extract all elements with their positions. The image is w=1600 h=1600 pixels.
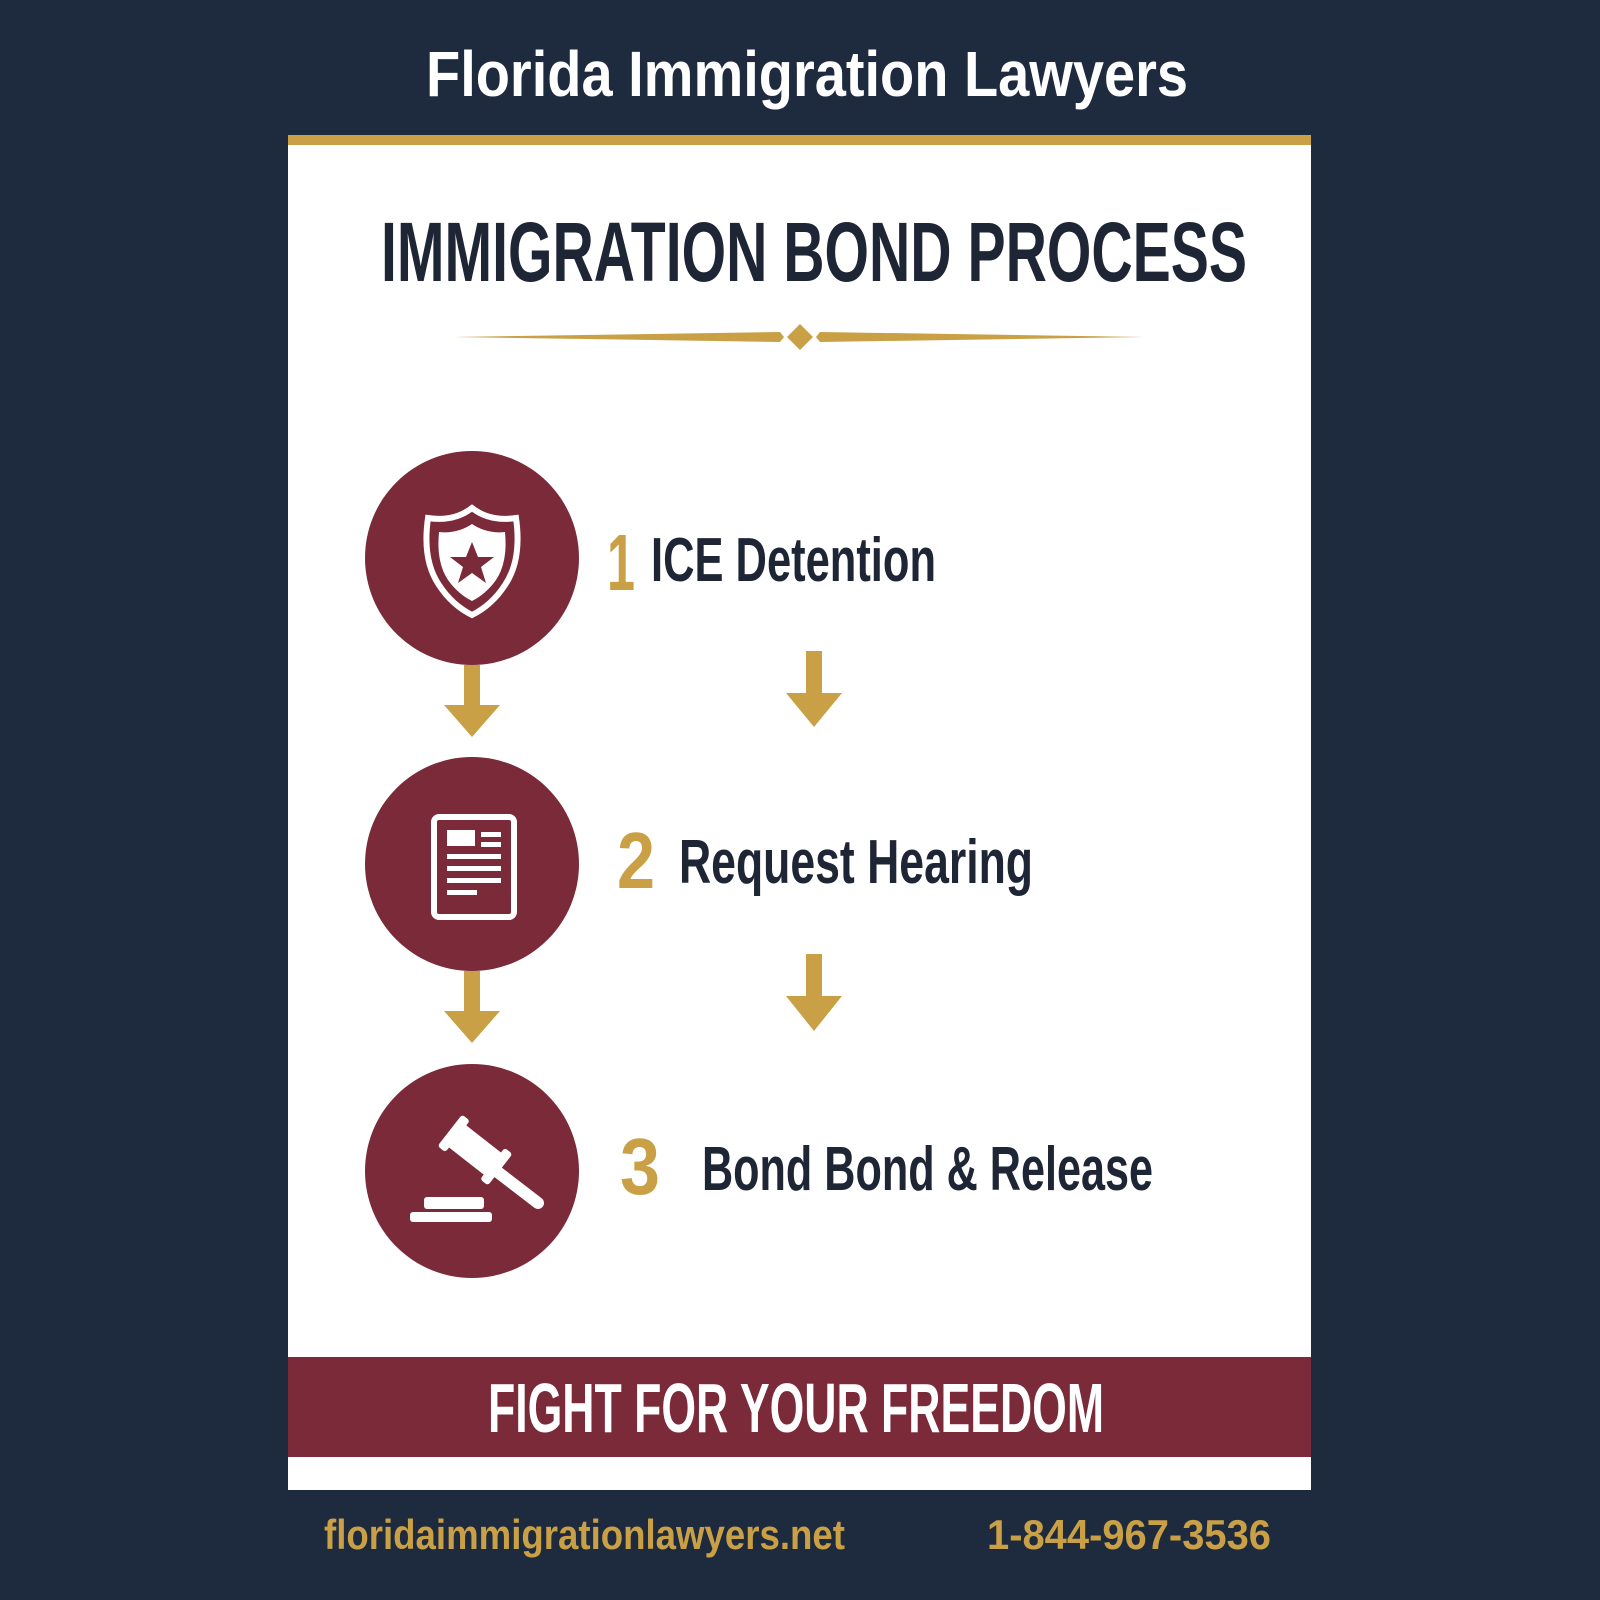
title: Florida Immigration Lawyers	[426, 38, 1188, 110]
step 3: Bond & Release	[365, 1064, 1153, 1278]
arrow: left 2	[444, 971, 500, 1043]
icon: document circle	[365, 757, 579, 971]
step label: Request Hearing	[679, 828, 1033, 897]
arrow: right 1	[786, 651, 842, 727]
step number 2: 2	[617, 816, 655, 905]
step label: Bond Bond & Release	[702, 1135, 1153, 1204]
footer: phone: 1-844-967-3536	[987, 1511, 1271, 1558]
step 2: Request Hearing	[365, 757, 1033, 971]
banner: call to action	[288, 1357, 1311, 1457]
step label: ICE Detention	[651, 526, 936, 595]
step number 3: 3	[620, 1122, 660, 1211]
panel: main white card	[288, 135, 1311, 1490]
step 1: ICE Detention	[365, 451, 936, 665]
icon: gavel circle	[365, 1064, 579, 1278]
arrow: right 2	[786, 954, 842, 1031]
arrow: left 1	[444, 665, 500, 737]
footer: website: floridaimmigrationlawyers.net	[324, 1511, 845, 1558]
ornament divider	[454, 324, 1145, 350]
icon: badge circle	[365, 451, 579, 665]
banner: call to action: FIGHT FOR YOUR FREEDOM	[488, 1369, 1104, 1447]
step number 1: 1	[607, 518, 635, 607]
